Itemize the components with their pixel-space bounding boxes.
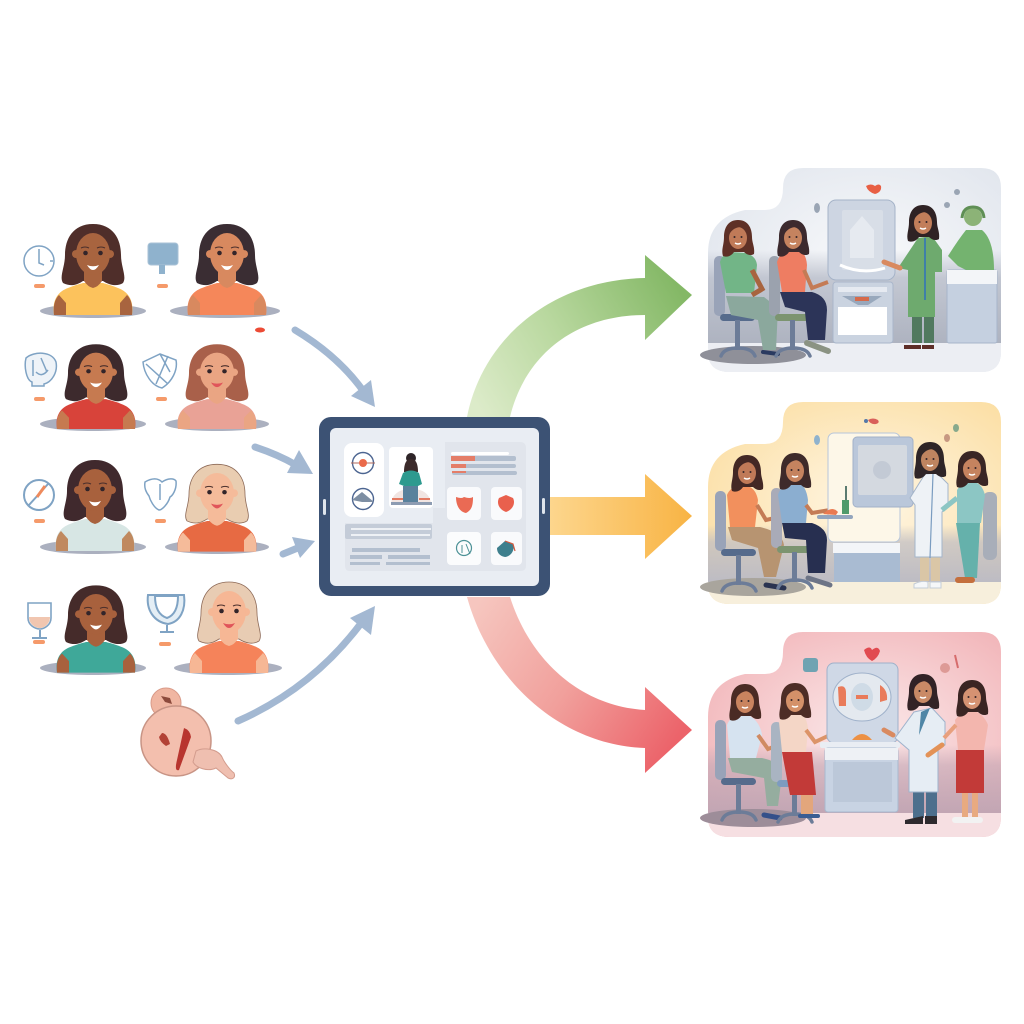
wall band bbox=[708, 525, 1001, 582]
patient 7 bbox=[40, 585, 146, 675]
woman right bbox=[944, 680, 988, 820]
arrowhead: input 3 bbox=[292, 537, 315, 558]
arrow: yellow outcome bbox=[550, 474, 692, 559]
doctor bbox=[884, 674, 945, 824]
nurse bbox=[948, 207, 994, 270]
icon: heart bbox=[866, 184, 881, 194]
scene background bbox=[708, 402, 1001, 604]
scanner base bbox=[833, 543, 900, 582]
screen: backing panel bbox=[345, 442, 526, 571]
icon: organ 2 bbox=[143, 354, 176, 388]
wall band bbox=[708, 745, 1001, 813]
screen: tile organ red bbox=[447, 487, 481, 520]
scanner column bbox=[828, 433, 900, 542]
icon: organ 1 bbox=[25, 353, 56, 386]
patient 2 bbox=[170, 224, 280, 318]
chair and woman 1 bbox=[715, 684, 782, 820]
floor shadow bbox=[700, 809, 806, 827]
arrow: red outcome bbox=[467, 597, 692, 773]
icon: red splash bbox=[255, 328, 265, 332]
tablet side buttons bbox=[323, 498, 545, 515]
screen: tile icon blue bbox=[491, 532, 522, 565]
tablet screen bbox=[330, 428, 539, 586]
panel: tablet bbox=[319, 417, 550, 596]
doctor bbox=[910, 442, 948, 588]
chair and woman 2 bbox=[771, 453, 830, 588]
screen: patient photo bbox=[389, 447, 433, 508]
floor shadow bbox=[700, 578, 806, 596]
panel: outcome yellow bbox=[700, 402, 1001, 604]
panel: outcome red bbox=[700, 632, 1001, 837]
icon: clock bbox=[24, 246, 54, 276]
scene background bbox=[708, 632, 1001, 837]
icon: sign bbox=[148, 243, 178, 274]
patient 3 bbox=[40, 344, 146, 431]
screen: tile organ coral bbox=[491, 487, 522, 520]
floor shadow bbox=[700, 346, 806, 364]
screen: dial panel bbox=[344, 443, 384, 517]
orange markers bbox=[33, 284, 171, 646]
icon: organ 3 bbox=[145, 479, 176, 510]
patient 4 bbox=[165, 344, 269, 431]
icon: uterus illustration bbox=[141, 688, 235, 779]
arrow: input 4 bbox=[238, 622, 362, 721]
patient 6 bbox=[165, 464, 269, 554]
chair and woman 1 bbox=[715, 455, 784, 591]
arrow: input 3 bbox=[283, 547, 300, 554]
icon: small organ marks bbox=[803, 655, 958, 673]
arrowhead: input 4 bbox=[350, 606, 375, 635]
panel: patients bbox=[24, 224, 282, 675]
chair and woman 1 bbox=[714, 220, 778, 356]
screen: notes panel bbox=[345, 524, 432, 565]
scene background bbox=[708, 168, 1001, 372]
icon: small organ marks bbox=[814, 424, 959, 445]
patient 5 bbox=[40, 460, 146, 554]
woman right bbox=[942, 451, 997, 580]
arrow: input 2 bbox=[255, 447, 296, 465]
icon: no-sign 3 bbox=[24, 480, 54, 510]
scanner monitor bbox=[853, 437, 913, 507]
arrowhead: input 1 bbox=[351, 380, 375, 407]
arrow: input 1 bbox=[295, 330, 364, 392]
patient 8 bbox=[174, 582, 282, 675]
chair and woman 2 bbox=[769, 220, 828, 356]
side table and bottle bbox=[817, 486, 853, 519]
screen: results panel bbox=[451, 452, 517, 475]
patient 1 bbox=[40, 224, 146, 318]
scanner bbox=[820, 663, 900, 812]
doctor bbox=[884, 205, 942, 349]
wall band bbox=[708, 250, 1001, 343]
screen: tile icon teal bbox=[447, 532, 481, 565]
icon: trophy glass bbox=[148, 595, 184, 632]
scanner bbox=[828, 200, 895, 343]
arrowhead: input 2 bbox=[287, 450, 313, 474]
arrow: green outcome bbox=[467, 255, 692, 417]
cabinet bbox=[947, 270, 997, 343]
icon: heart bbox=[864, 418, 879, 424]
icon: wine glass bbox=[28, 603, 51, 638]
chair and woman 2 bbox=[771, 683, 830, 822]
icon: heart bbox=[864, 648, 880, 661]
icon: small organ marks bbox=[814, 189, 960, 213]
panel: outcome green bbox=[700, 168, 1001, 372]
